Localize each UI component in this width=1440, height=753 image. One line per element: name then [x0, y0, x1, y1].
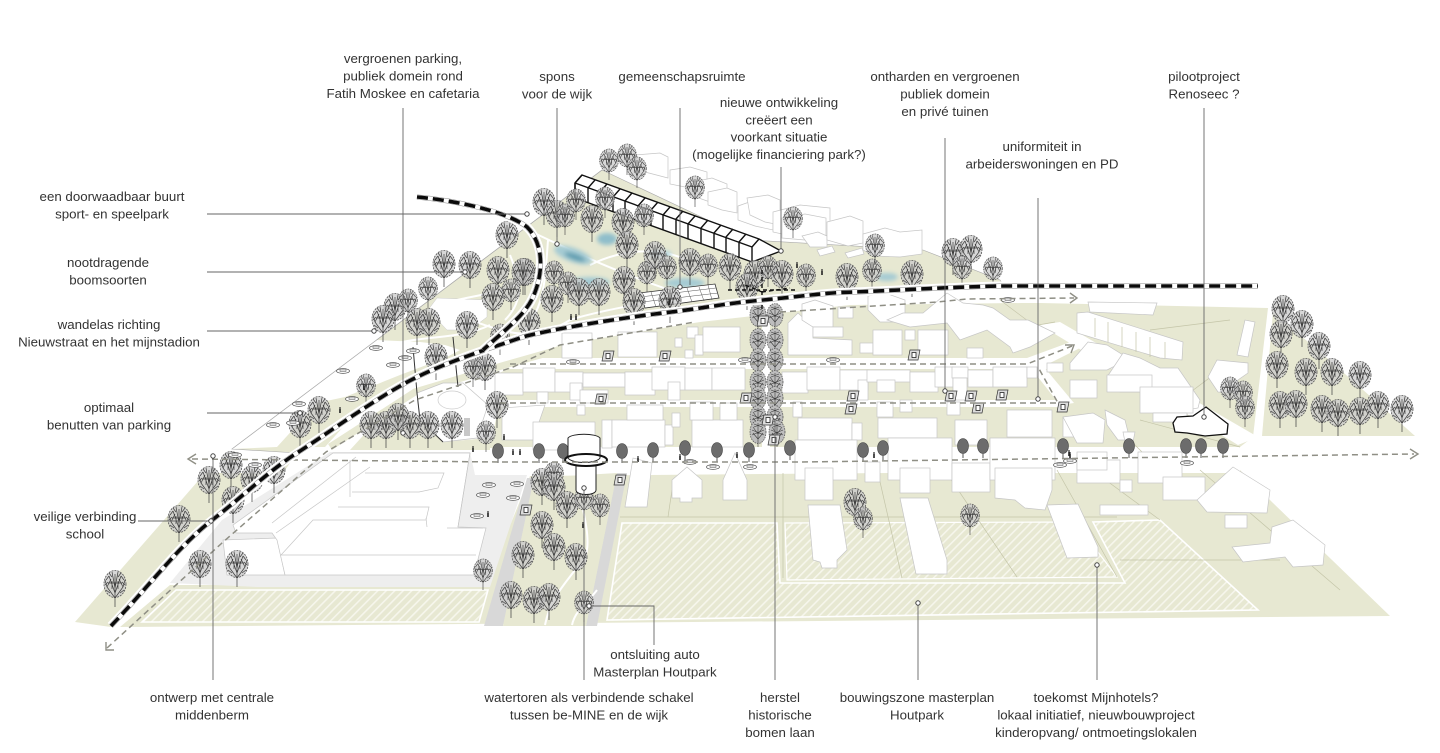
leader: nootdragende — [207, 271, 465, 273]
label: nieuwe ontwikkeling: voorkant situatie — [731, 130, 827, 145]
ground: town area — [490, 303, 1268, 447]
label: pilootproject: pilootproject — [1168, 69, 1240, 84]
label: veilige verbinding: veilige verbinding — [34, 509, 136, 524]
label: bouwingszone: bouwingszone masterplan — [840, 690, 994, 705]
hatched building zones — [142, 520, 1258, 622]
leader: veilige verbinding — [138, 520, 211, 522]
gray dashed route: along railway — [106, 322, 695, 650]
label: spons: spons — [539, 69, 575, 84]
label: herstel bomen laan: herstel — [760, 690, 800, 705]
trees: historic avenue — [750, 304, 785, 447]
leader: bouwingszone — [917, 603, 919, 680]
olive lower park patch — [280, 400, 372, 447]
gray dashed route: main street — [188, 449, 1418, 464]
label: ontsluiting auto: ontsluiting auto — [610, 647, 700, 662]
green strip along railway — [330, 346, 572, 447]
trees: east park — [1221, 296, 1413, 436]
trees: west park — [289, 222, 681, 447]
leader: parking — [402, 108, 404, 433]
label: nieuwe ontwikkeling: (mogelijke financiering park?) — [692, 147, 866, 162]
ground: east park — [1262, 312, 1415, 436]
town houses: middle row — [495, 363, 1063, 403]
label: watertoren: watertoren als verbindende schakel — [483, 690, 694, 705]
site plan illustration — [75, 144, 1418, 650]
label: nieuwe ontwikkeling: nieuwe ontwikkeling — [720, 95, 838, 110]
label: ontsluiting auto: Masterplan Houtpark — [593, 664, 717, 680]
label: bouwingszone: Houtpark — [890, 708, 944, 722]
ground: left strip — [75, 453, 297, 627]
label: optimaal parking: optimaal — [84, 400, 134, 415]
label: ontwerp middenberm: ontwerp met centrale — [150, 690, 274, 705]
water ponds — [552, 233, 898, 288]
label: wandelas: Nieuwstraat en het mijnstadion — [18, 334, 200, 350]
parking spot icons — [520, 316, 1069, 515]
label: doorwaadbaar park: een doorwaadbaar buurt — [40, 189, 185, 204]
leader: middenberm — [212, 456, 214, 680]
gray access roads — [484, 473, 627, 626]
north west park edge line — [232, 170, 602, 449]
text labels — [18, 51, 1240, 740]
gray dashed route: street two — [500, 367, 1058, 403]
leader: bomen laan — [774, 417, 776, 680]
ground: south zone — [120, 470, 1390, 627]
label: nieuwe ontwikkeling: creëert een — [745, 112, 813, 127]
school grounds — [170, 452, 527, 587]
label: ontharden: publiek domein — [900, 86, 990, 102]
label: wandelas: wandelas richting — [57, 317, 160, 332]
trees: around mosque — [360, 392, 508, 452]
pedestrians — [339, 262, 1071, 528]
access arrows at avenue crossing — [728, 270, 796, 312]
olive central green with watertower — [503, 473, 617, 626]
park paths — [392, 230, 700, 625]
label: spons: voor de wijk — [522, 86, 592, 102]
school building — [223, 453, 486, 575]
street trees along main street — [492, 438, 1228, 463]
label: vergroenen parking: publiek domein rond — [343, 68, 463, 84]
label: watertoren: tussen be-MINE en de wijk — [510, 708, 668, 722]
lot boundary lines — [620, 300, 1340, 590]
leader: wandelas — [207, 330, 374, 332]
leader: uniformiteit — [1037, 198, 1039, 399]
label: toekomst mijnhotels: kinderopvang/ ontmoetingslokalen — [995, 725, 1197, 740]
trees: left strip and school — [104, 452, 492, 607]
ground: park north of railway — [232, 170, 1005, 453]
leader: pilootproject — [1203, 108, 1205, 417]
community greenhouse — [639, 284, 719, 308]
playground area — [428, 298, 487, 330]
ground: area under mosque — [350, 403, 500, 450]
white parking wedge — [232, 340, 460, 449]
label: doorwaadbaar park: sport- en speelpark — [55, 206, 169, 222]
leader: nieuwe ontwikkeling — [780, 167, 782, 251]
label: pilootproject: Renoseec ? — [1169, 86, 1239, 102]
leader end markers — [209, 212, 1206, 608]
label: vergroenen parking: vergroenen parking, — [344, 51, 462, 66]
label: vergroenen parking: Fatih Moskee en cafetaria — [326, 86, 480, 101]
label: nootdragende: boomsoorten — [69, 272, 147, 288]
east houses — [1063, 302, 1255, 443]
leader: ontsluiting — [589, 606, 654, 645]
label: uniformiteit: arbeiderswoningen en PD — [965, 156, 1119, 172]
label: nootdragende: nootdragende — [67, 255, 149, 270]
label: toekomst mijnhotels: lokaal initiatief, nieuwbouwproject — [997, 708, 1195, 722]
label: ontwerp middenberm: middenberm — [175, 708, 249, 722]
watertower — [565, 434, 607, 494]
label: uniformiteit: uniformiteit in — [1002, 139, 1082, 154]
leader: gemeenschapsruimte — [679, 108, 681, 287]
gray dashed route: north east — [780, 293, 1077, 312]
label: ontharden: ontharden en vergroenen — [870, 69, 1020, 84]
town houses: south row — [502, 400, 1080, 450]
leader: parkeren — [207, 412, 300, 414]
apartment blocks behind new development — [635, 153, 922, 258]
trees: central green — [500, 462, 609, 623]
trees: upper park — [514, 144, 1002, 322]
new development row (black outline) — [575, 175, 781, 262]
railway: long bike route — [111, 286, 1258, 626]
label: gemeenschapsruimte: gemeenschapsruimte — [618, 69, 746, 84]
label: veilige verbinding: school — [66, 526, 104, 542]
label: ontharden: en privé tuinen — [901, 104, 989, 119]
trees: hatched zone — [844, 488, 979, 538]
parked cars — [228, 298, 1194, 518]
leader: doorwaadbaar — [207, 213, 527, 215]
gray dashed route: street one — [510, 345, 1074, 364]
leader lines — [138, 108, 1206, 680]
south houses along main street — [625, 438, 1325, 567]
white streets — [490, 305, 1258, 473]
railway: curved branch — [417, 197, 541, 350]
pilot project house Renoseec — [1173, 407, 1228, 436]
houses on hatched zone — [808, 498, 1098, 574]
leader: ontharden — [944, 138, 946, 391]
label: herstel bomen laan: bomen laan — [745, 725, 815, 740]
town houses: north row — [562, 293, 1055, 358]
leader: mijnhotels — [1096, 565, 1098, 680]
label: toekomst mijnhotels: toekomst Mijnhotels? — [1034, 690, 1158, 705]
label: herstel bomen laan: historische — [748, 708, 812, 722]
leader: spons — [556, 108, 558, 244]
label: optimaal parking: benutten van parking — [47, 418, 171, 432]
mosque — [413, 337, 488, 442]
leader: watertoren — [583, 488, 585, 680]
